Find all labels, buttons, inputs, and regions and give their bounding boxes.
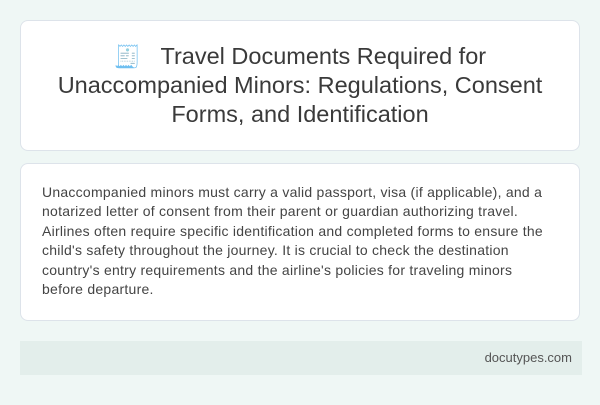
description text: Unaccompanied minors must carry a valid passport, visa (if applicable), and a notarized letter of consent from their parent or guardian authorizing travel. Airlines often require specific identification and completed forms to ensure the child's safety throughout the journey. It is crucial to check the destination country's entry requirements and the airline's policies for traveling minors before departure. <box>42 184 543 297</box>
footer: docutypes.com <box>485 350 572 365</box>
footer <box>20 341 582 375</box>
title card <box>20 20 580 151</box>
title: 🧾 Travel Documents Required for Unaccompanied Minors: Regulations, Consent Forms, and Identification <box>58 43 542 127</box>
description card <box>20 163 580 321</box>
